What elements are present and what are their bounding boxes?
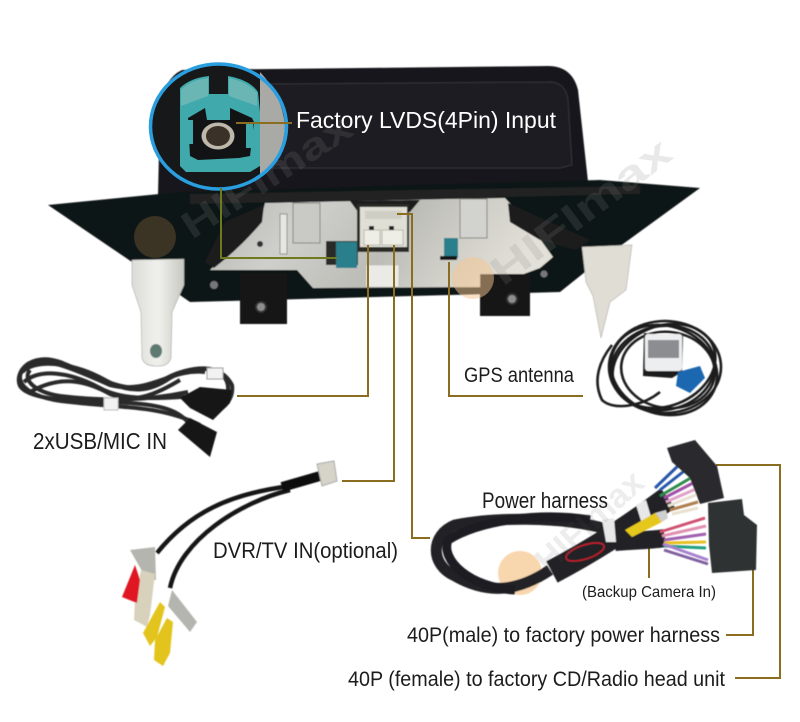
USB leader: [237, 245, 368, 396]
main braided trunk: [552, 498, 668, 572]
antenna cable ring three: [616, 326, 720, 414]
yellow RCA one: [143, 602, 165, 646]
cable loop five: [24, 373, 195, 398]
watermark: left logo: HIFImax: [174, 106, 360, 248]
silver tag one: [130, 547, 156, 580]
bezel top highlight band: [190, 186, 640, 204]
LVDS leader to socket: [221, 188, 337, 258]
FAKRA plug: [676, 366, 705, 393]
callout leader lines: [221, 123, 780, 678]
power harness leader: [397, 214, 430, 538]
serial sticker: [366, 265, 399, 287]
lower trunk: [615, 538, 665, 542]
upper cable: [157, 486, 290, 553]
USB/MIC cable photo: [19, 359, 232, 457]
silver metal plate: [210, 198, 553, 288]
GPS antenna photo: [597, 309, 729, 429]
USB plug one: [180, 387, 232, 420]
left metal tab: [293, 203, 320, 243]
power harness photo: [436, 440, 757, 595]
label: USB/MIC: 2xUSB/MIC IN: [33, 428, 167, 454]
40P female connector bottom: [708, 499, 757, 573]
silver tag two: [168, 590, 197, 632]
right bracket: [582, 245, 632, 338]
teal LVDS socket on plate: [326, 241, 358, 268]
watermark: harness logo text: HIFImax: [528, 463, 652, 580]
LVDS leader into callout: [236, 122, 292, 124]
label: backup camera: (Backup Camera In): [582, 584, 716, 601]
backup camera leader: [648, 535, 650, 578]
white mic plug: [207, 368, 223, 379]
antenna module: [643, 333, 683, 378]
LVDS zoom callout circle: [150, 64, 286, 189]
callout disc: [150, 64, 286, 189]
yellow RCA plug: [625, 513, 662, 537]
label: 40P male: 40P(male) to factory power harness: [407, 624, 720, 647]
40P male connector top: [667, 440, 724, 504]
white label one: [602, 518, 616, 542]
40P female leader: [716, 465, 780, 678]
label: LVDS input: Factory LVDS(4Pin) Input: [296, 107, 557, 133]
white plug: [317, 461, 337, 486]
white cable tag: [104, 398, 118, 410]
cable sleeve: [282, 476, 320, 487]
teal GPS socket: [440, 238, 458, 260]
upper wire bundle: [655, 462, 698, 514]
watermark: left logo: [134, 106, 360, 258]
right side dark wedge: [508, 203, 590, 250]
callout blue ring: [150, 64, 286, 189]
top lobe shading right: [229, 78, 257, 106]
radio head unit photo: [48, 66, 700, 366]
connector inner cavity: [188, 108, 254, 160]
left bracket: [132, 259, 184, 366]
antenna cable ring five: [599, 311, 729, 429]
label: GPS antenna: GPS antenna: [464, 364, 574, 387]
40P male leader: [726, 560, 753, 635]
red wire loop: [564, 539, 606, 565]
left mounting block: [240, 273, 287, 324]
braided loop two: [447, 517, 590, 590]
silver side strip: [260, 72, 285, 178]
cavity right side pillar: [246, 124, 253, 148]
yellow RCA two: [154, 618, 173, 666]
plate slot: [280, 214, 287, 254]
right small screw: [540, 270, 548, 278]
white RCA: [134, 570, 155, 627]
cable loop one: [20, 361, 205, 425]
left small screw: [210, 281, 218, 289]
label: DVR/TV: DVR/TV IN(optional): [213, 538, 398, 563]
dark recess left of plate: [205, 205, 264, 268]
antenna cable ring two: [604, 318, 722, 418]
plate screw: [257, 241, 263, 247]
antenna outer loop: [597, 345, 660, 406]
connector pin centre: [206, 126, 230, 146]
label: Power harness: Power harness: [482, 488, 608, 513]
antenna cable ring one: [609, 321, 721, 413]
teal connector body: [180, 76, 260, 172]
watermark: right logo: [452, 130, 680, 299]
cable loop three: [28, 370, 188, 399]
braided loop: [436, 519, 610, 588]
DVR/TV cable photo: [122, 461, 337, 666]
DVR leader: [342, 245, 394, 481]
rear housing: [158, 66, 590, 200]
watermark: right logo: HIFImax: [482, 130, 680, 294]
cable loop two: [19, 359, 228, 425]
connector pin ring: [202, 122, 234, 150]
cable loop six: [30, 380, 180, 398]
antenna cable ring four: [600, 309, 728, 423]
right metal tab: [460, 199, 487, 238]
white multi-pin connector: [350, 200, 420, 252]
cable loop four: [22, 364, 232, 412]
antenna label: [645, 334, 682, 371]
red RCA: [122, 565, 140, 603]
top lobe shading left: [181, 78, 208, 106]
label: 40P female: 40P (female) to factory CD/Radio head unit: [348, 668, 725, 691]
RCA silver tip: [655, 510, 668, 522]
right mounting block: [480, 274, 530, 316]
white label two: [636, 500, 652, 524]
lower cable: [170, 490, 290, 588]
label text block: [648, 340, 679, 358]
front bezel: [48, 180, 700, 302]
USB plug two: [178, 418, 217, 457]
watermark orange disc: [498, 551, 542, 595]
housing contour: [270, 82, 572, 168]
GPS leader: [449, 262, 583, 396]
cavity left side pillar: [186, 120, 193, 144]
lower wire bundle: [660, 518, 708, 564]
